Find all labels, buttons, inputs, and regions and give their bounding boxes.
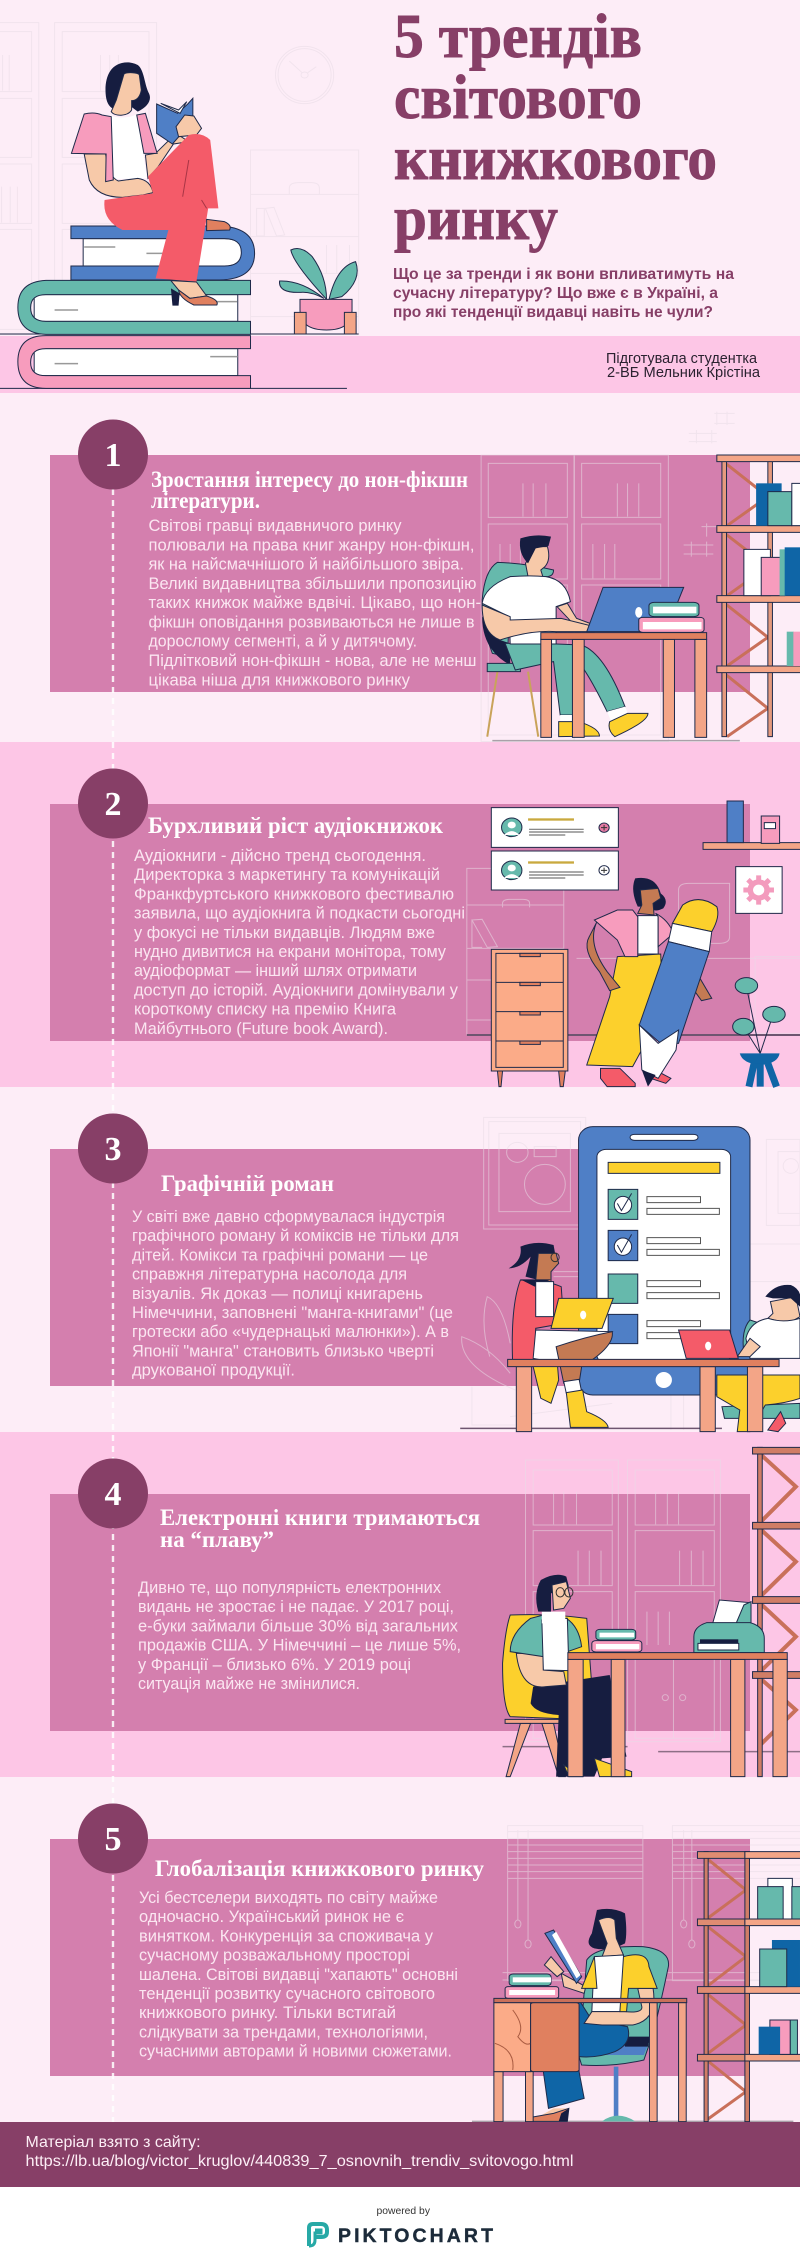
title: ринку	[394, 185, 558, 253]
icon: stool with plant	[733, 978, 785, 1087]
author credit: 2-ВБ Мельник Крістіна	[607, 365, 761, 381]
trend 3 body text: У світі вже давно сформувалася індустрія	[132, 1207, 445, 1226]
subtitle: про які тенденції видавці навіть не чули?	[393, 304, 713, 321]
piktochart logo: PIKTOCHART	[338, 2225, 493, 2247]
bookshelf	[697, 1852, 800, 2122]
trend 1 heading	[151, 467, 468, 513]
panel: trend 4 background	[50, 1494, 750, 1731]
trend 3 body text: гротески або «чудернацькі малюнки»). А в	[132, 1322, 449, 1341]
footer source band: https://lb.ua/blog/victor_kruglov/440839_7_osnovnih_trendiv_svitovogo.html	[26, 2153, 574, 2170]
trend 5 body text: тенденції розвитку сучасного світового	[139, 1984, 435, 2003]
illustration: phone with checklist and two people	[460, 1117, 800, 1432]
title: книжкового	[394, 125, 717, 193]
trend 1 heading: літератури.	[151, 488, 260, 513]
icon: filing cabinet	[491, 949, 568, 1087]
trend 5 body text: сучасному розважальному просторі	[139, 1946, 410, 1965]
panel: trend 5 background	[50, 1839, 750, 2076]
trend 5 number badge	[78, 1804, 148, 1874]
author credit: Підготувала студентка	[606, 351, 758, 367]
trend 5 body text	[139, 1888, 458, 2061]
trend 2 body text: короткому списку на премію Книга	[134, 1000, 397, 1019]
trend 5 body text: книжкового ринку. Тільки встигай	[139, 2003, 396, 2022]
trend 3 number badge	[78, 1114, 148, 1184]
trend 2 body text: нудно дивитися на екрани монітора, тому	[134, 942, 447, 961]
trend 1 body text	[148, 516, 481, 689]
trend 1 heading: Зростання інтересу до нон-фікшн	[151, 467, 468, 492]
trend 1 body text: Підлітковий нон-фікшн - нова, але не менш	[148, 651, 476, 670]
trend 4 body text: у Франції – близько 6%. У 2019 році	[138, 1655, 411, 1674]
icon: reading woman	[71, 62, 230, 306]
icon: laptop and books	[587, 587, 704, 632]
trend 4 body text: видань не зростає і не падає. У 2017 році,	[138, 1597, 454, 1616]
dashed timeline connector	[112, 489, 114, 2122]
trend 4 number badge: 4	[104, 1476, 122, 1513]
trend 2 body text: у фокусі не тільки видавців. Людям вже	[134, 923, 435, 942]
trend 3 body text: графічного роману й коміксів не тільки для	[132, 1226, 459, 1245]
icon: potted plant	[279, 248, 357, 334]
trend 2 body text: аудіоформат — інший шлях отримати	[134, 961, 417, 980]
trend 4 heading: Електронні книги тримаються	[160, 1505, 480, 1530]
white footer strip	[0, 2187, 800, 2267]
trend 2 number badge	[78, 768, 148, 838]
trend 5 body text: одночасно. Український ринок не є	[139, 1907, 405, 1926]
trend 3 number badge: 3	[104, 1131, 122, 1168]
icon: red laptop	[679, 1330, 738, 1358]
floor line	[472, 2120, 793, 2122]
trend 5 body text: сучасними авторами й новими сюжетами.	[139, 2042, 452, 2061]
floor line	[492, 740, 740, 742]
trend 3 heading: Графічній роман	[161, 1171, 334, 1196]
icon: printer and books	[592, 1600, 764, 1653]
subtitle	[393, 266, 734, 321]
trend 3 body text: справжня літературна насолода для	[132, 1265, 407, 1284]
trend 3 body text: дітей. Комікси та графічні романи — це	[132, 1245, 428, 1264]
trend 5 body text: шалена. Світові видавці "хапають" основні	[139, 1965, 458, 1984]
trend 4 body text: ситуація майже не змінилися.	[138, 1674, 360, 1693]
bookshelf	[753, 1447, 800, 1777]
trend 3 body text: Німеччини, заповнені "манга-книгами" (це	[132, 1303, 453, 1322]
trend 2 body text: Директорка з маркетингу та комунікацій	[134, 865, 440, 884]
icon: desk	[541, 633, 707, 737]
cards	[491, 808, 618, 890]
trend 3 body text: друкованої продукції.	[132, 1361, 295, 1380]
trend 5 body text: Усі бестселери виходять по світу майже	[139, 1888, 438, 1907]
trend 1 body text: дорослому сегменті, а й у дитячому.	[148, 632, 417, 651]
trend 1 number badge	[78, 420, 148, 490]
trend 2 body text: заявила, що аудіокнига й подкасти сьогодні	[134, 904, 465, 923]
illustration: woman reading on a stack of books	[0, 23, 359, 388]
icon: man at laptop	[482, 535, 648, 737]
trend 5 number badge: 5	[104, 1821, 122, 1858]
trend 5 body text: слідкувати за трендами, технологіями,	[139, 2022, 428, 2041]
trend 1 body text: полювали на права книг жанру нон-фікшн,	[148, 535, 474, 554]
icon: giant pencil	[639, 900, 718, 1087]
trend 2 body text: Майбутнього (Future book Award).	[134, 1019, 388, 1038]
panel: trend 1 background	[50, 455, 750, 692]
trend 2 number badge: 2	[104, 786, 122, 823]
trend 3 body text: Японії "манга" становить близько чверті	[132, 1341, 434, 1360]
icon: woman on teal chair	[531, 1909, 669, 2121]
powered by label: powered by	[376, 2205, 431, 2217]
trend 1 body text: фікшн оповідання розвиваються не лише в	[148, 612, 475, 631]
icon: woman on yellow chair	[503, 1575, 632, 1777]
trend 1 body text: як на найсмачнішого й найбільшого звіра.	[148, 555, 464, 574]
icon: stack of books	[18, 226, 255, 388]
floor line	[467, 1034, 800, 1036]
illustration: woman reading at desk with bookshelf	[472, 1826, 800, 2122]
trend 4 heading: на “плаву”	[160, 1527, 274, 1552]
title: світового	[394, 64, 642, 132]
trend 1 body text: цікава ніша для книжкового ринку	[148, 670, 411, 689]
icon: books on desk	[505, 1974, 559, 1998]
trend 2 body text: доступ до історій. Аудіокниги домінували у	[134, 980, 459, 999]
trend 3 body text: візуалів. Як доказ — полиці книгарень	[132, 1284, 423, 1303]
footer source band: Матеріал взято з сайту:	[26, 2134, 200, 2151]
trend 5 heading: Глобалізація книжкового ринку	[155, 1856, 484, 1881]
trend 2 heading: Бурхливий ріст аудіокнижок	[148, 813, 444, 838]
illustration: woman with giant pencil	[467, 801, 800, 1087]
trend 4 number badge	[78, 1458, 148, 1528]
icon: desk	[494, 1998, 687, 2122]
bookshelf	[717, 455, 800, 737]
subtitle: сучасну літературу? Що вже є в Україні, а	[393, 285, 718, 302]
footer source band	[0, 2122, 800, 2187]
trend 2 body text: Аудіокниги - дійсно тренд сьогодення.	[134, 846, 426, 865]
icon: woman with yellow laptop	[509, 1243, 613, 1427]
trend 1 body text: Світові гравці видавничого ринку	[148, 516, 402, 535]
panel: trend 3 background	[50, 1149, 750, 1386]
trend 4 body text: Дивно те, що популярність електронних	[138, 1578, 442, 1597]
icon: desk	[568, 1653, 787, 1777]
trend 1 body text: таких книжок майже вдвічі. Цікаво, що нон-	[148, 593, 481, 612]
trend 2 body text	[134, 846, 465, 1038]
trend 4 body text	[138, 1578, 461, 1693]
title: 5 трендів	[394, 3, 642, 71]
trend 3 body text	[132, 1207, 459, 1380]
icon: phone with checklist	[579, 1127, 750, 1395]
table top and right legs	[508, 1359, 779, 1432]
illustration: woman at desk with printer	[503, 1447, 800, 1777]
title	[394, 3, 717, 253]
trend 1 number badge: 1	[104, 437, 122, 474]
trend 5 body text: винятком. Конкуренція за споживача у	[139, 1926, 434, 1945]
trend 2 body text: Франкфуртського книжкового фестивалю	[134, 884, 454, 903]
floor line	[460, 1427, 722, 1429]
trend 1 body text: Великі видавництва збільшили пропозицію	[148, 574, 476, 593]
wall shelf	[703, 801, 800, 849]
icon: table leg left	[516, 1367, 532, 1432]
floor lines	[503, 1747, 800, 1752]
trend 4 body text: продажів США. У Німеччині – це лише 5%,	[138, 1636, 461, 1655]
author credit	[606, 351, 761, 381]
icon: person with red laptop	[717, 1285, 800, 1432]
icon: woman	[587, 878, 712, 1087]
subtitle: Що це за тренди і як вони впливатимуть на	[393, 266, 734, 283]
floor lines	[0, 334, 359, 388]
trend 4 heading	[160, 1505, 480, 1552]
panel: trend 2 background	[50, 804, 750, 1041]
trend 4 body text: е-буки займали більше 30% від загальних	[138, 1616, 459, 1635]
illustration: man with laptop at desk and bookshelf	[481, 412, 800, 742]
icon: gear card	[736, 867, 782, 913]
